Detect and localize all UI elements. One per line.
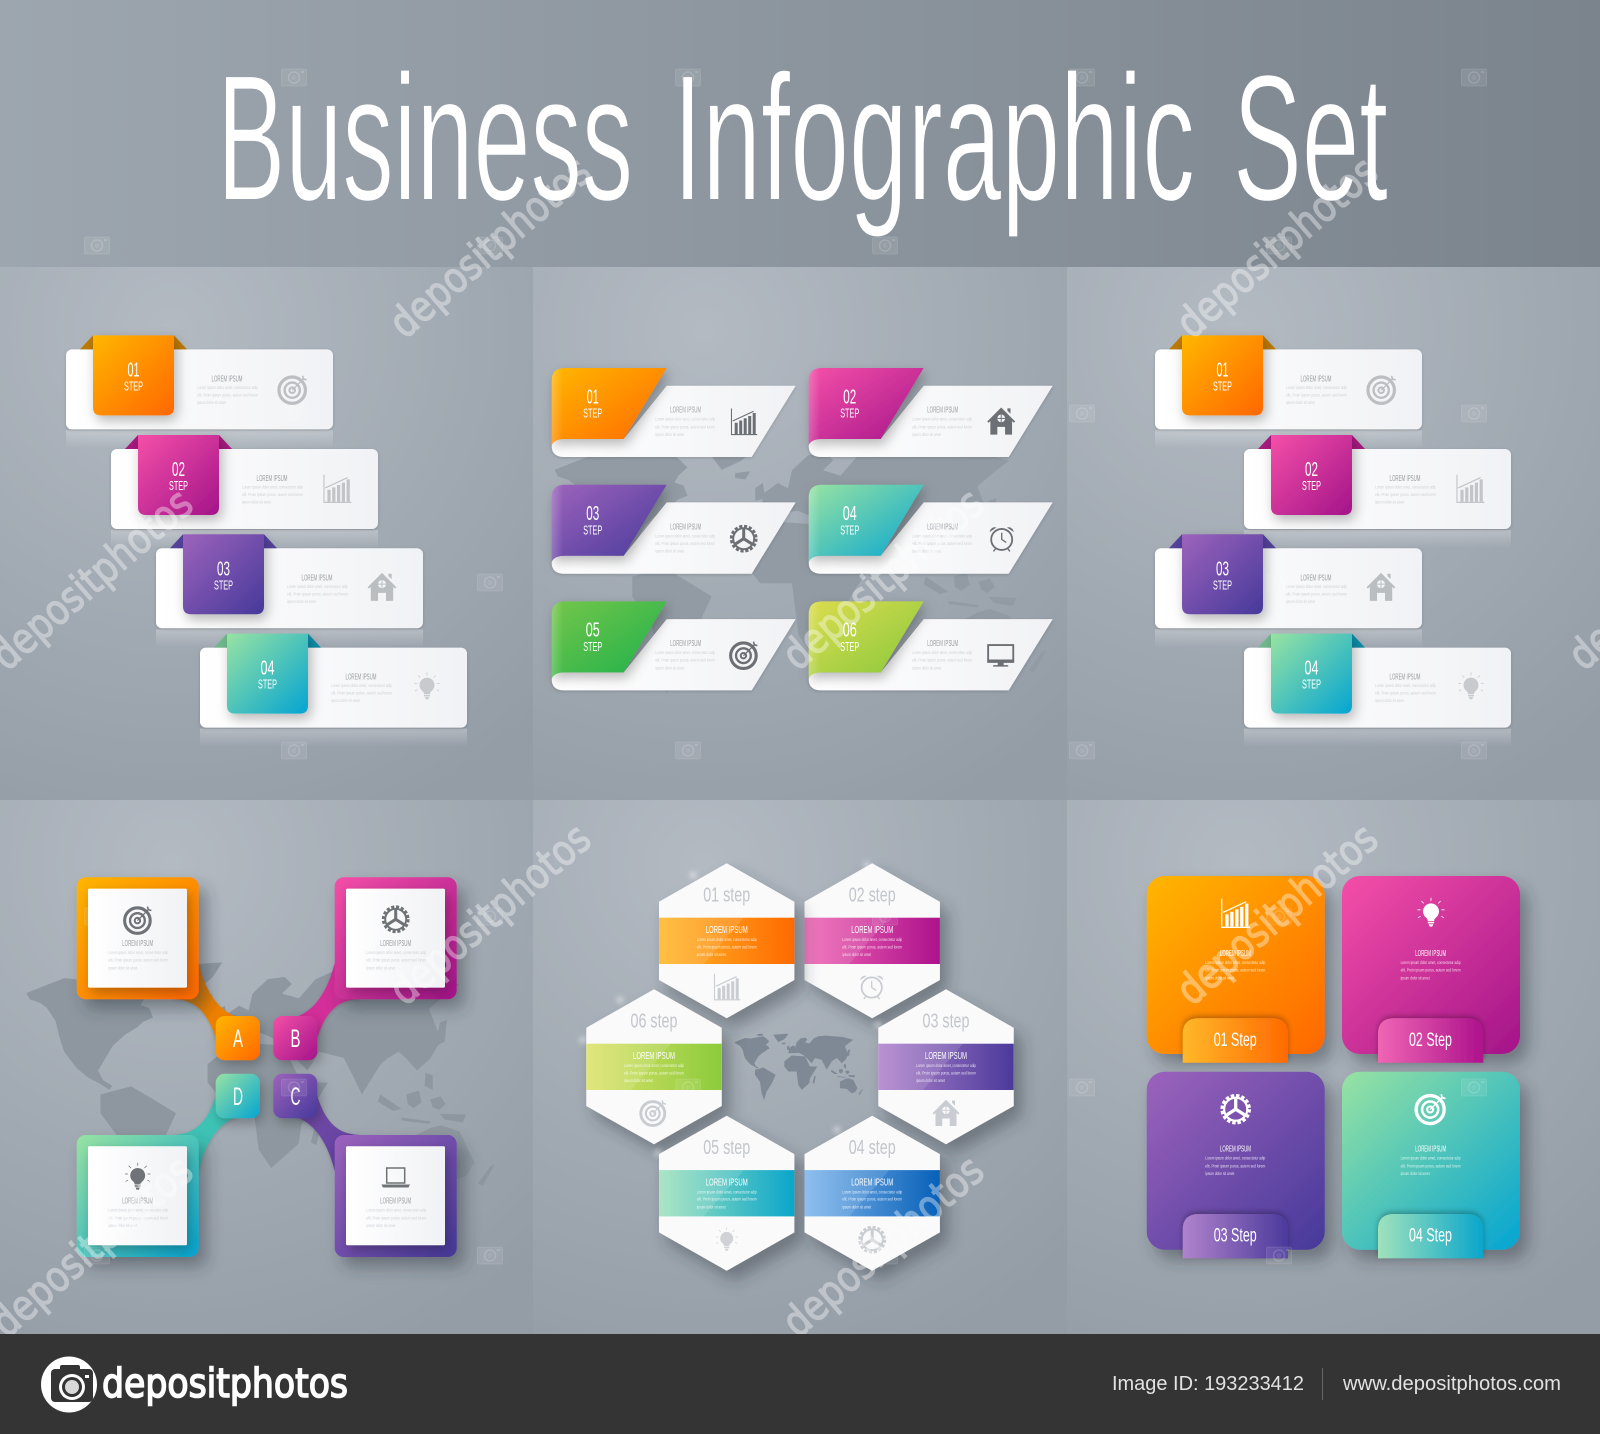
step banner 02: 02 — [843, 386, 856, 408]
badge D — [216, 1074, 260, 1118]
step banner 01: STEP — [583, 407, 602, 421]
hexagon 01: elit. Proin ipsum purus, autem sed lorem — [697, 944, 757, 949]
step card 04: ipsum dolor sit amet — [1375, 698, 1405, 703]
step card 01: elit. Proin ipsum purus, autem sed lorem — [197, 392, 258, 397]
step card 04: Lorem ipsum dolor amet, consectetur adip — [1375, 683, 1436, 688]
step banner 05: 05 — [586, 620, 600, 642]
square B: ipsum dolor sit amet — [366, 965, 396, 970]
world map — [26, 962, 495, 1205]
tile 03: LOREM IPSUM — [1220, 1145, 1251, 1154]
hexagon 02: Lorem ipsum dolor amet, consectetur adip — [842, 937, 903, 942]
step card 04: STEP — [258, 678, 277, 692]
watermark text: depositphotos — [1166, 814, 1387, 1015]
step card 01: LOREM IPSUM — [212, 374, 243, 383]
panel: stepped ribbon cards, left — [66, 335, 467, 747]
hexagon 04: 04 step — [849, 1137, 896, 1159]
step card 02 — [1244, 435, 1511, 548]
hexagon 06 — [586, 989, 722, 1144]
step banner 01: elit. Proin ipsum purus, autem sed lorem — [655, 424, 715, 429]
hexagon 03: 03 step — [922, 1011, 970, 1033]
step card 04: Lorem ipsum dolor amet, consectetur adip — [331, 683, 392, 688]
footer wordmark: depositphotos — [102, 1361, 348, 1407]
tile 01 — [1147, 876, 1325, 1063]
watermark text: depositphotos — [772, 1146, 993, 1347]
badge B — [273, 1016, 317, 1060]
tile 02 — [1342, 876, 1520, 1063]
tile 04 — [1342, 1072, 1520, 1258]
step card 01: STEP — [124, 379, 143, 393]
step banner 04 — [809, 485, 1053, 574]
step banner 04: 04 — [843, 503, 857, 525]
hexagon 05: elit. Proin ipsum purus, autem sed lorem — [697, 1197, 757, 1202]
hexagon 01: Lorem ipsum dolor amet, consectetur adip — [697, 937, 757, 942]
hexagon 03: Lorem ipsum dolor amet, consectetur adip — [916, 1063, 976, 1068]
step card 04: 04 — [260, 658, 274, 680]
connector A — [173, 963, 240, 1045]
step banner 02: LOREM IPSUM — [927, 406, 958, 415]
step banner 01: LOREM IPSUM — [670, 406, 701, 415]
square C: LOREM IPSUM — [380, 1197, 411, 1206]
title: Infographic — [673, 38, 1195, 239]
step card 02: ipsum dolor sit amet — [1375, 500, 1405, 504]
step banner 06: ipsum dolor sit amet — [912, 665, 942, 670]
panel background: bottom right — [1067, 800, 1600, 1334]
step card 02: elit. Proin ipsum purus, autem sed lorem — [1375, 492, 1436, 497]
tile 01: Lorem ipsum dolor amet, consectetur adip — [1205, 960, 1266, 965]
hexagon 04: ipsum dolor sit amet — [842, 1204, 872, 1209]
step banner 01 — [552, 368, 796, 457]
hexagon 04: LOREM IPSUM — [851, 1177, 893, 1188]
step card 02: 02 — [172, 459, 185, 481]
panel background: bottom middle — [533, 800, 1067, 1334]
step banner 01: 01 — [587, 386, 599, 408]
step card 01 — [66, 335, 333, 448]
tile 03 — [1147, 1072, 1325, 1258]
watermark text: depositphotos — [379, 814, 600, 1015]
hexagon 05: Lorem ipsum dolor amet, consectetur adip — [697, 1189, 757, 1194]
square D: Lorem ipsum dolor amet, consectetur adip — [108, 1208, 169, 1213]
hexagon 04 — [804, 1116, 940, 1271]
square C — [335, 1135, 457, 1257]
step card 03 — [1155, 534, 1422, 647]
step card 02: STEP — [169, 479, 188, 493]
step card 02: elit. Proin ipsum purus, autem sed lorem — [242, 492, 303, 497]
panel background: top left — [0, 267, 533, 800]
hexagon 06: ipsum dolor sit amet — [624, 1078, 654, 1083]
square A — [77, 877, 199, 999]
square D: ipsum dolor sit amet — [108, 1223, 138, 1228]
hexagon 03: LOREM IPSUM — [925, 1051, 967, 1062]
hexagon 04: elit. Proin ipsum purus, autem sed lorem — [842, 1197, 902, 1202]
tile 01: LOREM IPSUM — [1220, 949, 1251, 958]
step banner 06: elit. Proin ipsum purus, autem sed lorem — [912, 658, 972, 663]
website: www.depositphotos.com — [1342, 1373, 1561, 1395]
tile 03: elit. Proin ipsum purus, autem sed lorem — [1205, 1163, 1265, 1168]
hexagon 06: 06 step — [630, 1011, 678, 1033]
tile 02: 02 Step — [1409, 1030, 1452, 1051]
square D: elit. Proin ipsum purus, autem sed lorem — [108, 1215, 168, 1220]
hexagon 05: 05 step — [703, 1137, 750, 1159]
step card 01: Lorem ipsum dolor amet, consectetur adip — [197, 385, 258, 390]
step banner 02: STEP — [840, 407, 859, 421]
hexagon 02: LOREM IPSUM — [851, 925, 893, 936]
step card 01: 01 — [128, 359, 140, 381]
panel: hexagon ring — [580, 862, 1014, 1271]
step card 04 — [1244, 634, 1511, 747]
step card 03: 03 — [217, 558, 230, 580]
step card 01: ipsum dolor sit amet — [1286, 400, 1316, 405]
step card 04 — [200, 634, 467, 747]
square B: Lorem ipsum dolor amet, consectetur adip — [366, 950, 427, 955]
tile 03: ipsum dolor sit amet — [1205, 1171, 1235, 1176]
title: Business — [217, 38, 633, 239]
step card 01: ipsum dolor sit amet — [197, 400, 227, 405]
hexagon 02: elit. Proin ipsum purus, autem sed lorem — [842, 944, 902, 949]
step banner 04: ipsum dolor sit amet — [912, 549, 942, 554]
tile 01: ipsum dolor sit amet — [1205, 975, 1235, 980]
step banner 06: 06 — [843, 620, 857, 642]
step banner 02 — [809, 368, 1053, 457]
step card 04: LOREM IPSUM — [1390, 673, 1421, 682]
tile 02: LOREM IPSUM — [1415, 949, 1446, 958]
step banner 02: elit. Proin ipsum purus, autem sed lorem — [912, 424, 972, 429]
hexagon 01: ipsum dolor sit amet — [697, 952, 726, 957]
step banner 06: Lorem ipsum dolor amet, consectetur adip — [912, 650, 973, 655]
tile 02: ipsum dolor sit amet — [1401, 975, 1430, 980]
step card 01: 01 — [1216, 359, 1228, 381]
hexagon 01: 01 step — [703, 885, 750, 907]
step banner 06 — [809, 601, 1053, 690]
step card 04: elit. Proin ipsum purus, autem sed lorem — [331, 691, 392, 696]
badge B: B — [290, 1025, 300, 1053]
hexagon 02: ipsum dolor sit amet — [842, 952, 872, 957]
tile 02: elit. Proin ipsum purus, autem sed lorem — [1401, 968, 1461, 973]
step banner 04: elit. Proin ipsum purus, autem sed lorem — [912, 541, 972, 546]
connector D — [173, 1089, 240, 1171]
square C: elit. Proin ipsum purus, autem sed lorem — [366, 1215, 426, 1220]
hexagon 04: Lorem ipsum dolor amet, consectetur adip — [842, 1189, 903, 1194]
image id: Image ID: 193233412 — [1112, 1373, 1304, 1395]
step banner 02: ipsum dolor sit amet — [912, 432, 942, 437]
step card 02: 02 — [1305, 459, 1318, 481]
hexagon 02: 02 step — [849, 885, 896, 907]
hexagon 06: elit. Proin ipsum purus, autem sed lorem — [624, 1070, 684, 1075]
step banner 05: ipsum dolor sit amet — [655, 665, 685, 670]
tile 02: Lorem ipsum dolor amet, consectetur adip — [1401, 960, 1461, 965]
step card 02: LOREM IPSUM — [256, 474, 288, 483]
title — [217, 38, 1388, 239]
step card 01: elit. Proin ipsum purus, autem sed lorem — [1286, 392, 1347, 397]
badge C: C — [290, 1083, 300, 1111]
square A: Lorem ipsum dolor amet, consectetur adip — [108, 950, 169, 955]
step card 02: Lorem ipsum dolor amet, consectetur adip — [1375, 484, 1436, 490]
footer bar — [0, 1334, 1600, 1434]
title: Set — [1233, 38, 1388, 239]
footer logo mark — [41, 1356, 97, 1412]
tile 01: elit. Proin ipsum purus, autem sed lorem — [1205, 968, 1265, 973]
panel: alternating ribbon cards, right — [1155, 335, 1511, 747]
step banner 03 — [552, 485, 796, 574]
small world map — [735, 1034, 863, 1100]
step card 03: elit. Proin ipsum purus, autem sed lorem — [1286, 591, 1347, 596]
square A: ipsum dolor sit amet — [108, 965, 138, 970]
step card 04: ipsum dolor sit amet — [331, 698, 361, 703]
step banner 04: LOREM IPSUM — [927, 522, 958, 531]
tile 04: elit. Proin ipsum purus, autem sed lorem — [1401, 1163, 1461, 1168]
hexagon 03: ipsum dolor sit amet — [916, 1078, 946, 1083]
panel background: top right — [1067, 267, 1600, 800]
step banner 05: STEP — [583, 640, 602, 654]
step card 03: ipsum dolor sit amet — [1286, 599, 1316, 604]
step card 02: STEP — [1302, 479, 1321, 493]
step banner 02: Lorem ipsum dolor amet, consectetur adip — [912, 417, 973, 422]
square B — [335, 877, 457, 999]
panel: ABCD connected squares with world map — [26, 877, 495, 1257]
step card 03: Lorem ipsum dolor amet, consectetur adip — [1286, 584, 1347, 589]
step card 03: LOREM IPSUM — [1300, 573, 1332, 582]
step card 01: STEP — [1213, 379, 1232, 393]
tile 04: 04 Step — [1409, 1226, 1452, 1247]
connector C — [293, 1089, 360, 1171]
hexagon 06: LOREM IPSUM — [633, 1051, 675, 1062]
badge A — [216, 1016, 260, 1060]
hexagon 05: LOREM IPSUM — [706, 1177, 748, 1188]
tile 04: ipsum dolor sit amet — [1401, 1171, 1430, 1176]
watermark text: depositphotos — [1166, 147, 1387, 348]
badge C — [273, 1074, 317, 1118]
header band — [0, 0, 1600, 267]
square D: LOREM IPSUM — [122, 1197, 153, 1206]
watermark camera stamps — [84, 69, 1486, 1264]
panel background: bottom left — [0, 800, 533, 1334]
hexagon 01: LOREM IPSUM — [706, 925, 748, 936]
step banner 05 — [552, 601, 796, 690]
badge D: D — [233, 1083, 243, 1111]
step card 04: elit. Proin ipsum purus, autem sed lorem — [1375, 691, 1436, 696]
step banner 03: elit. Proin ipsum purus, autem sed lorem — [655, 541, 715, 546]
step banner 06: LOREM IPSUM — [927, 639, 958, 648]
step banner 05: elit. Proin ipsum purus, autem sed lorem — [655, 658, 715, 663]
panel: parallelogram steps with world map, middle — [552, 368, 1053, 693]
step card 04: LOREM IPSUM — [346, 673, 377, 682]
world map — [555, 438, 1046, 693]
step card 03: Lorem ipsum dolor amet, consectetur adip — [287, 584, 348, 589]
square B: elit. Proin ipsum purus, autem sed lorem — [366, 958, 426, 963]
tile 01: 01 Step — [1214, 1030, 1257, 1051]
step card 03: LOREM IPSUM — [302, 573, 333, 582]
step banner 05: Lorem ipsum dolor amet, consectetur adip — [655, 650, 716, 655]
panel background: top middle — [533, 267, 1067, 800]
hexagon 05 — [659, 1116, 794, 1271]
badge A: A — [233, 1025, 243, 1053]
step card 01 — [1155, 335, 1422, 448]
hexagon 01 — [659, 863, 794, 1018]
step card 03: ipsum dolor sit amet — [287, 599, 317, 604]
step card 02: LOREM IPSUM — [1390, 474, 1421, 483]
hexagon 02 — [804, 863, 940, 1018]
step banner 03: Lorem ipsum dolor amet, consectetur adip — [655, 533, 716, 538]
square C: Lorem ipsum dolor amet, consectetur adip — [366, 1208, 427, 1213]
step card 03: STEP — [214, 578, 233, 592]
step banner 05: LOREM IPSUM — [670, 639, 701, 648]
tile 03: Lorem ipsum dolor amet, consectetur adip — [1205, 1156, 1266, 1161]
hexagon 03: elit. Proin ipsum purus, autem sed lorem — [916, 1070, 976, 1075]
step card 04: 04 — [1304, 658, 1318, 680]
square A: LOREM IPSUM — [122, 939, 153, 948]
step banner 04: STEP — [840, 523, 859, 537]
watermark text: depositphotos — [379, 147, 600, 348]
square C: ipsum dolor sit amet — [366, 1223, 396, 1228]
hexagon 06: Lorem ipsum dolor amet, consectetur adip — [624, 1063, 684, 1068]
hexagon 05: ipsum dolor sit amet — [697, 1204, 726, 1209]
step card 01: Lorem ipsum dolor amet, consectetur adip — [1286, 385, 1347, 390]
step card 03: elit. Proin ipsum purus, autem sed lorem — [287, 591, 348, 596]
step banner 03: LOREM IPSUM — [670, 522, 701, 531]
panel: gradient step tiles — [1147, 876, 1520, 1258]
step card 03: 03 — [1216, 558, 1229, 580]
hexagon 03 — [878, 989, 1014, 1144]
step banner 06: STEP — [840, 640, 859, 654]
step banner 03: 03 — [586, 503, 599, 525]
step card 03 — [156, 534, 423, 647]
step card 01: LOREM IPSUM — [1300, 374, 1332, 383]
connector B — [293, 963, 360, 1045]
step card 02: Lorem ipsum dolor amet, consectetur adip — [242, 484, 303, 490]
tile 04: LOREM IPSUM — [1415, 1145, 1446, 1154]
tile 03: 03 Step — [1214, 1226, 1257, 1247]
step card 03: STEP — [1213, 578, 1232, 592]
square D — [77, 1135, 199, 1257]
tile 04: Lorem ipsum dolor amet, consectetur adip — [1401, 1156, 1461, 1161]
step card 02 — [111, 435, 378, 548]
step banner 03: STEP — [583, 523, 602, 537]
square B: LOREM IPSUM — [380, 939, 411, 948]
square A: elit. Proin ipsum purus, autem sed lorem — [108, 958, 168, 963]
step card 02: ipsum dolor sit amet — [242, 500, 272, 504]
step banner 03: ipsum dolor sit amet — [655, 549, 685, 554]
step banner 04: Lorem ipsum dolor amet, consectetur adip — [912, 533, 973, 538]
watermark text: depositphotos — [772, 479, 993, 680]
sparkle highlights — [580, 862, 881, 1156]
step banner 01: Lorem ipsum dolor amet, consectetur adip — [655, 417, 716, 422]
step banner 01: ipsum dolor sit amet — [655, 432, 685, 437]
step card 04: STEP — [1302, 678, 1321, 692]
